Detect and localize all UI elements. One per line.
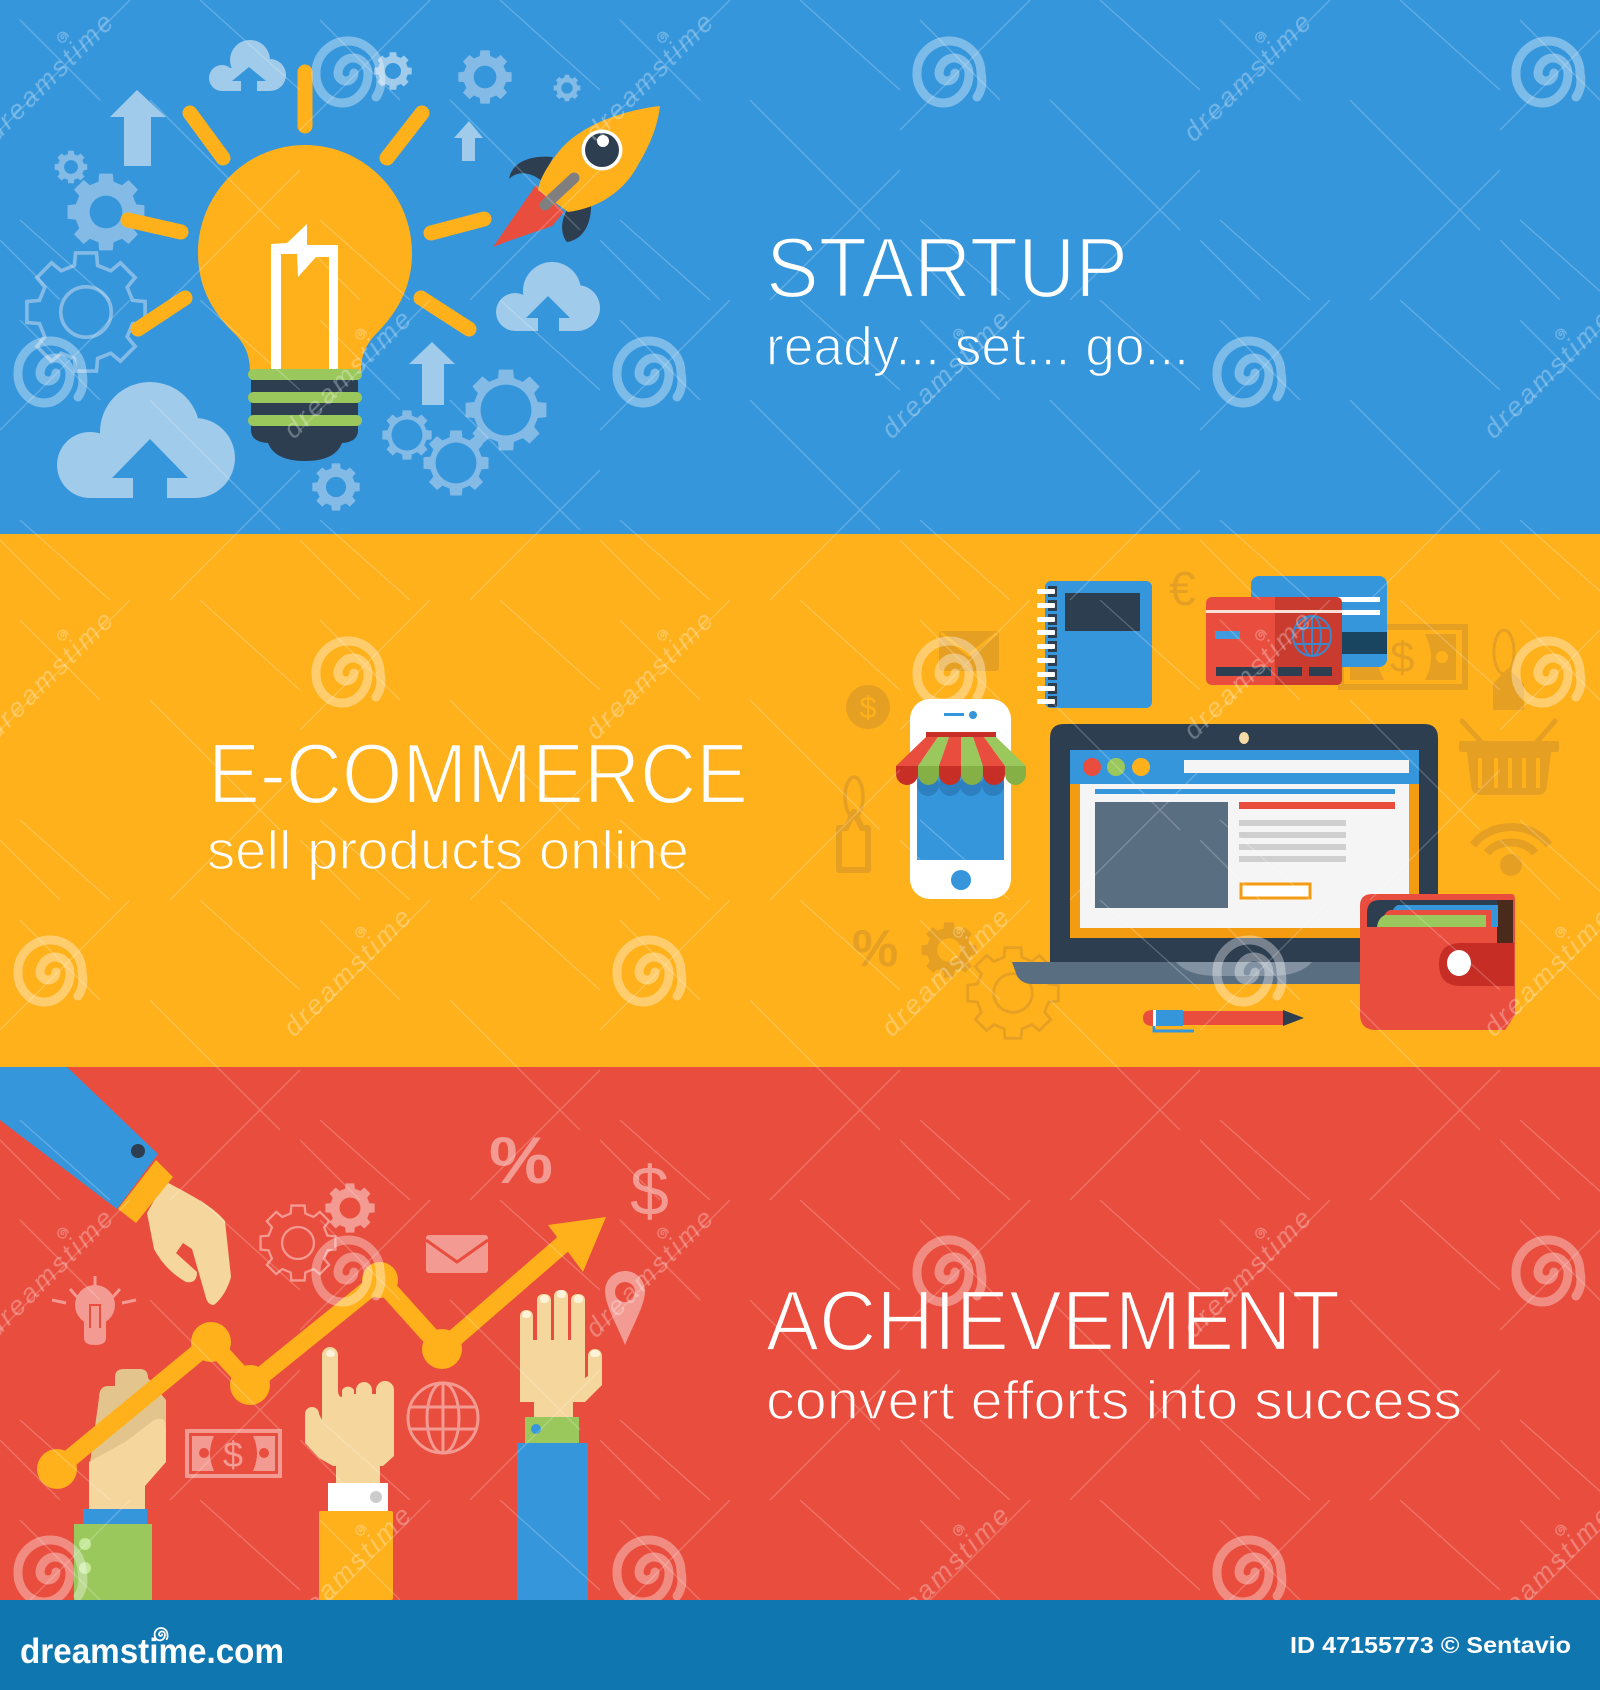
icon: faint envelope bbox=[426, 1235, 488, 1273]
icon: smartphone with shop awning bbox=[896, 699, 1026, 899]
heading: startup: STARTUP bbox=[766, 221, 1128, 316]
icon: rocket bbox=[493, 106, 660, 247]
icon: faint percent: % bbox=[489, 1123, 553, 1197]
icon: top hand with sleeve bbox=[0, 1067, 231, 1305]
icon: faint money bill: $ bbox=[223, 1434, 243, 1475]
icon: faint basket bbox=[1459, 721, 1559, 795]
icon: light bulb bbox=[128, 72, 484, 461]
subheading: achievement: convert efforts into success bbox=[766, 1369, 1462, 1431]
icon: large cloud upload bbox=[57, 382, 235, 498]
subheading: e-commerce: sell products online bbox=[207, 819, 689, 881]
icon: red credit card bbox=[1206, 597, 1342, 685]
icon: faint percent: % bbox=[852, 920, 898, 978]
icon: faint envelope bbox=[939, 631, 999, 671]
subheading: startup: ready... set... go... bbox=[766, 315, 1189, 377]
icon: laptop with web page bbox=[1012, 724, 1440, 984]
icon: pen bbox=[1143, 1010, 1304, 1031]
icon: faint euro: € bbox=[1169, 563, 1196, 616]
icon: faint globe bbox=[408, 1383, 478, 1453]
icon: gears bbox=[27, 50, 580, 511]
footer logo: dreamstime.com bbox=[20, 1632, 284, 1671]
icon: faint dollar: $ bbox=[630, 1152, 669, 1230]
icon: blue credit card bbox=[1251, 576, 1387, 667]
footer bar bbox=[0, 1600, 1600, 1690]
panel: startup bbox=[0, 0, 1600, 534]
icon: faint wifi bbox=[1473, 827, 1549, 872]
icon: faint gears bbox=[921, 922, 1058, 1038]
icon: faint mini bulb bbox=[52, 1276, 136, 1345]
icon: faint gears bbox=[261, 1183, 375, 1280]
icon: center pointing hand bbox=[305, 1347, 394, 1600]
icon: faint price tag right bbox=[1493, 630, 1524, 710]
icon: notebook bbox=[1037, 581, 1152, 708]
icon: wallet bbox=[1360, 894, 1515, 1030]
icon: small cloud upload bbox=[209, 40, 286, 91]
heading: achievement: ACHIEVEMENT bbox=[766, 1274, 1340, 1369]
panel: e-commerce bbox=[0, 534, 1600, 1067]
chart: rising line with arrow bbox=[37, 1217, 606, 1489]
icon: faint money bill bbox=[185, 1429, 282, 1478]
panel: achievement bbox=[0, 1067, 1600, 1600]
icon: faint price tag left bbox=[839, 777, 868, 870]
icon: faint dollar coin: $ bbox=[859, 690, 877, 725]
icon: medium cloud upload bbox=[496, 262, 600, 331]
footer credit: ID 47155773 © Sentavio bbox=[1290, 1632, 1571, 1658]
icon: faint money bill: $ bbox=[1390, 633, 1414, 682]
icon: right raised hand bbox=[517, 1290, 602, 1600]
heading: e-commerce: E-COMMERCE bbox=[208, 727, 748, 822]
icon: faint dollar coin bbox=[846, 685, 890, 729]
icon: upward arrows bbox=[110, 90, 483, 405]
icon: left hand holding chart bbox=[74, 1369, 166, 1600]
icon: faint map pin bbox=[605, 1271, 645, 1345]
icon: faint money bill bbox=[1338, 624, 1468, 690]
